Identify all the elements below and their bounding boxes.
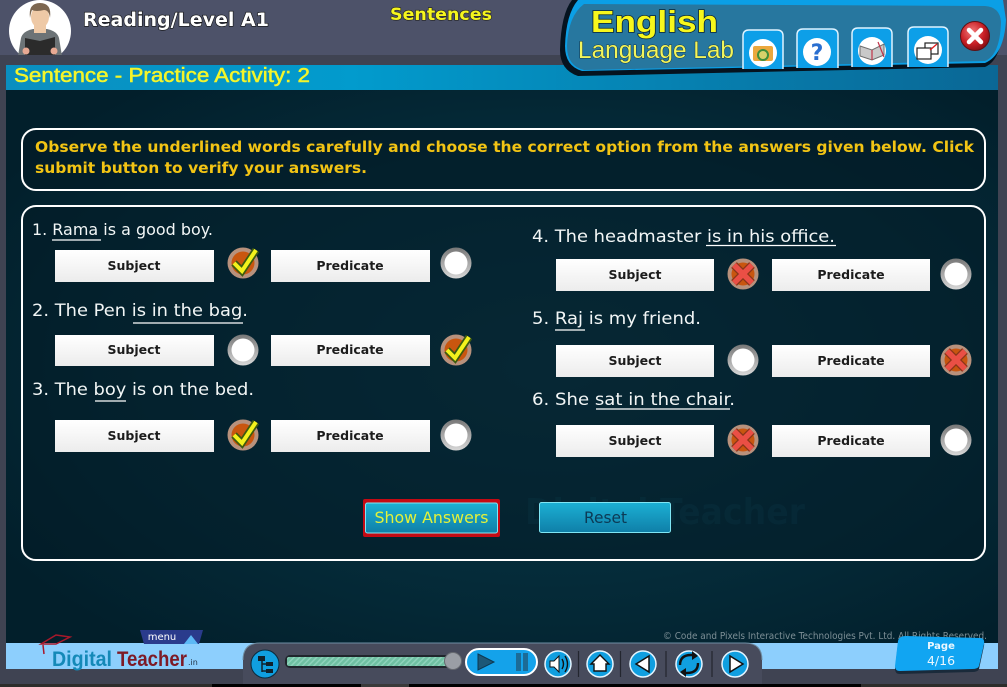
page indicator — [895, 636, 984, 674]
logo: Digital Teacher: .in — [188, 658, 198, 667]
question 2: Subject — [108, 342, 161, 357]
icon: student reading avatar — [9, 0, 71, 55]
question 3 — [32, 380, 472, 452]
icon: folder tab — [743, 30, 783, 69]
button: show answers: Show Answers — [374, 508, 488, 527]
progress slider — [285, 652, 462, 670]
question 3: 3. The boy is on the bed. — [32, 380, 254, 400]
title bar — [6, 65, 998, 90]
page indicator: Page — [927, 641, 955, 652]
activity title: Sentence - Practice Activity: 2 — [14, 65, 310, 87]
watermark: Digital Teacher — [525, 492, 805, 533]
menu tab — [140, 630, 203, 644]
question 1: Subject — [108, 258, 161, 273]
question 5 — [532, 309, 972, 377]
top header bar — [0, 0, 1007, 55]
question 2: 2. The Pen is in the bag. — [32, 301, 248, 321]
button: show answers — [363, 499, 500, 537]
question 3: Predicate — [316, 428, 384, 443]
icon: outline tree — [251, 650, 279, 678]
icon: home — [587, 651, 613, 677]
question 1: Predicate — [316, 258, 384, 273]
panel: instructions — [22, 129, 985, 190]
logo: Digital Teacher — [41, 635, 198, 671]
bottom edge — [0, 684, 1007, 687]
question 4 — [532, 227, 972, 291]
panel: questions — [22, 206, 985, 560]
icon: help tab: ? — [811, 41, 823, 66]
question 2: Predicate — [316, 342, 384, 357]
copyright: © Code and Pixels Interactive Technologies Pvt. Ltd. All Rights Reserved. — [663, 631, 987, 642]
icon: help tab — [797, 29, 838, 68]
button: reset — [540, 502, 670, 532]
instruction text: Observe the underlined words carefully and choose the correct option from the answers given below. Click — [35, 138, 975, 156]
menu tab: menu — [148, 632, 176, 643]
button: reset: Reset — [584, 508, 627, 527]
question 6 — [532, 390, 972, 457]
question 1: 1. Rama is a good boy. — [32, 220, 213, 239]
logo subtitle: Language Lab: Language Lab — [578, 37, 734, 64]
question 2 — [32, 301, 472, 366]
question 5: Predicate — [817, 353, 885, 368]
question 6: 6. She sat in the chair. — [532, 390, 735, 410]
icon: sound — [545, 651, 571, 677]
icon: refresh — [676, 651, 702, 677]
footer strip — [6, 643, 998, 669]
instruction text: submit button to verify your answers. — [35, 159, 367, 177]
question 1 — [32, 220, 472, 282]
media control bar — [243, 643, 762, 684]
icon: previous — [630, 651, 656, 677]
question 4: Subject — [608, 267, 662, 282]
icon: window resize tab — [908, 27, 948, 67]
page indicator: 4/16 — [927, 653, 955, 668]
main background — [6, 90, 998, 643]
logo: Digital Teacher: Teacher — [117, 648, 187, 671]
icon: next — [722, 651, 748, 677]
question 6: Subject — [608, 433, 662, 448]
panel: English Language Lab logo — [560, 0, 1006, 76]
question 5: 5. Raj is my friend. — [532, 309, 701, 329]
question 3: Subject — [108, 428, 161, 443]
question 4: Predicate — [817, 267, 885, 282]
logo: Digital Teacher: Digital — [52, 648, 112, 671]
question 5: Subject — [608, 353, 662, 368]
play pause control — [466, 649, 537, 675]
icon: close button — [960, 22, 990, 50]
logo title: English: English — [591, 4, 718, 39]
heading: topic: Sentences — [390, 5, 492, 25]
question 6: Predicate — [817, 433, 885, 448]
heading: level: Reading/Level A1 — [83, 10, 269, 31]
question 4: 4. The headmaster is in his office. — [532, 227, 835, 247]
icon: book tab — [852, 28, 892, 67]
